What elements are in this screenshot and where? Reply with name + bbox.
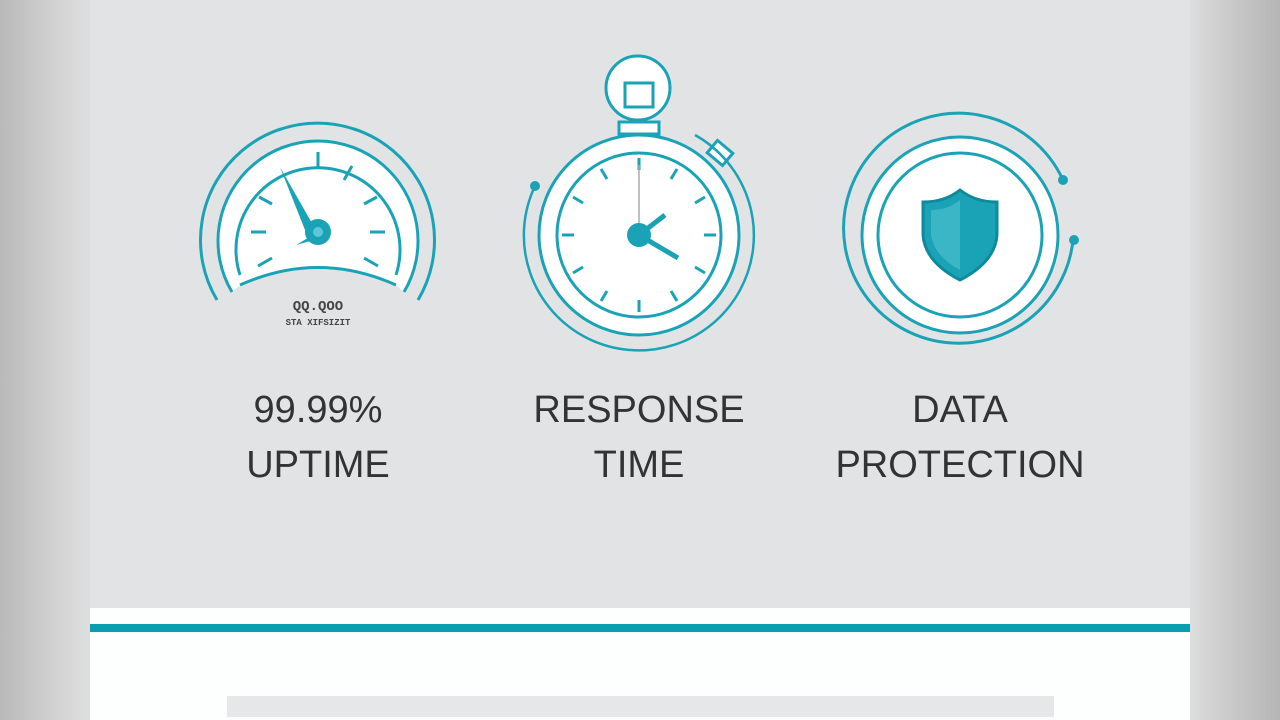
text: uptime label: UPTIME <box>246 444 390 486</box>
text: data protection label: PROTECTION <box>835 444 1085 486</box>
text: data protection label: DATA <box>912 389 1008 431</box>
text: data protection label <box>835 389 1085 486</box>
text: response time label <box>533 389 745 486</box>
text: gauge small label <box>286 299 351 328</box>
text: gauge small label: QQ.QOO <box>293 299 343 315</box>
text: uptime label: 99.99% <box>254 389 382 431</box>
icon: stopwatch <box>524 56 754 350</box>
text: uptime label <box>246 389 390 486</box>
text: response time label: TIME <box>594 444 684 486</box>
icon: shield in circle <box>844 113 1079 343</box>
icon: gauge <box>201 123 435 300</box>
text: response time label: RESPONSE <box>533 389 745 431</box>
text: gauge small label: STA XIFSIZIT <box>286 318 351 328</box>
